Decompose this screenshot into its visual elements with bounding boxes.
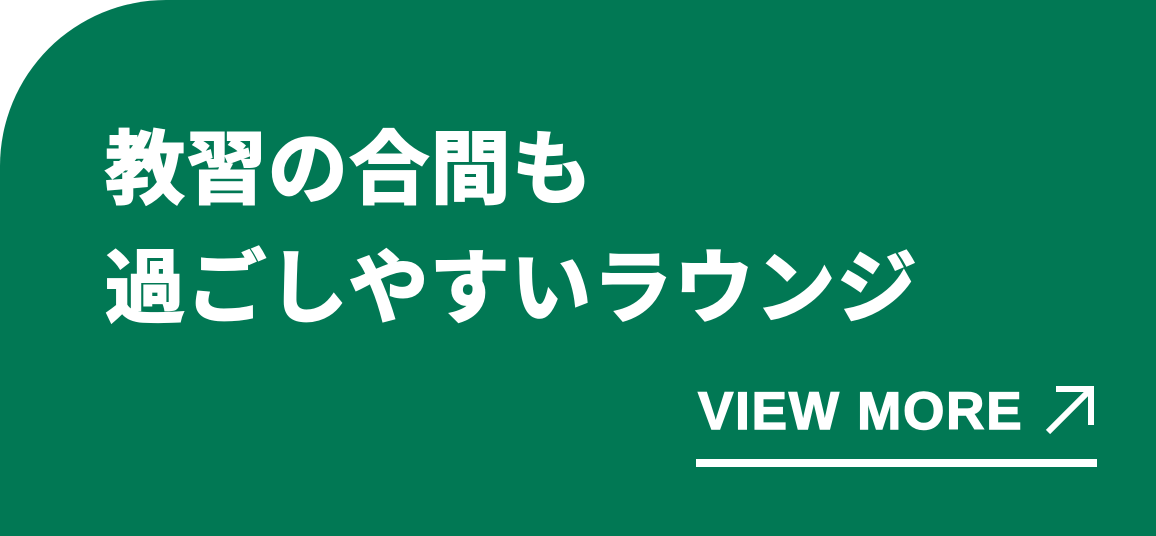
heading line 1: 教習の合間も bbox=[105, 125, 593, 214]
view more link text: VIEW MORE bbox=[698, 382, 1023, 441]
underline bbox=[696, 459, 1097, 467]
heading line 2: 過ごしやすいラウンジ bbox=[105, 244, 918, 333]
icon: diagonal arrow bbox=[1046, 386, 1094, 434]
